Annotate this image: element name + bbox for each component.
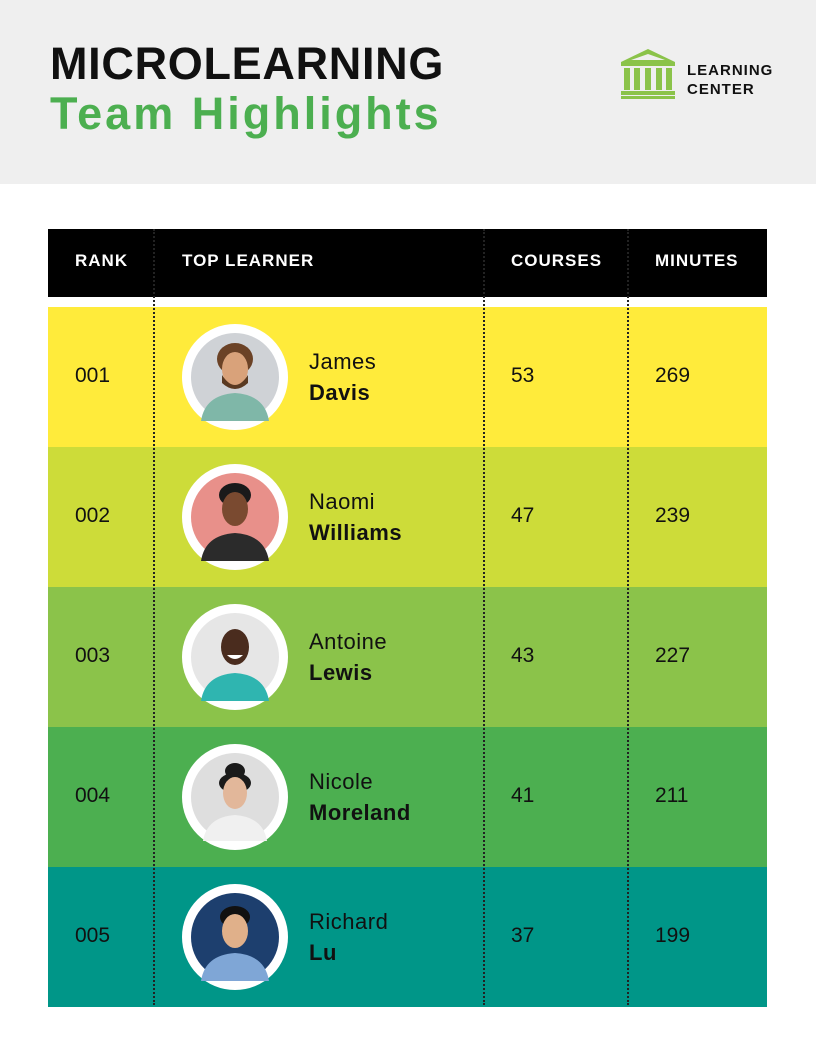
logo text: LEARNING [687,62,773,79]
icon: building [621,49,675,99]
table header: RANK [75,251,128,270]
logo: learning center [621,49,773,99]
row 1: James [309,349,376,374]
row 2: Naomi [309,489,375,514]
avatar: Richard [182,884,288,990]
row 4: 004 [75,784,110,807]
table header [48,229,767,297]
avatar: Naomi [182,464,288,570]
avatar: Nicole [182,744,288,850]
row 5: Richard [309,909,388,934]
title: MICROLEARNING [50,38,444,89]
row 2: 239 [655,504,690,527]
header band [0,0,816,184]
table header: MINUTES [655,251,738,270]
row 5: 37 [511,924,534,947]
row 1: 269 [655,364,690,387]
row 2: 47 [511,504,534,527]
row 4: Moreland [309,800,411,825]
row 4 [48,727,767,867]
row 1: 53 [511,364,534,387]
avatar: Antoine [182,604,288,710]
subtitle: Team Highlights [50,88,442,139]
row 5 [48,867,767,1007]
row 3 [48,587,767,727]
table header: TOP LEARNER [182,251,314,270]
row 5: Lu [309,940,337,965]
row 2 [48,447,767,587]
row 3: 43 [511,644,534,667]
row 3: 227 [655,644,690,667]
row 3: Lewis [309,660,373,685]
row 5: 005 [75,924,110,947]
row 3: Antoine [309,629,387,654]
row 1 [48,307,767,447]
row 5: 199 [655,924,690,947]
avatar: James [182,324,288,430]
row 4: 41 [511,784,534,807]
row 2: Williams [309,520,402,545]
row 3: 003 [75,644,110,667]
logo text [687,62,773,98]
row 1: 001 [75,364,110,387]
row 2: 002 [75,504,110,527]
row 4: Nicole [309,769,373,794]
logo text: CENTER [687,81,755,98]
table header: COURSES [511,251,602,270]
row 1: Davis [309,380,370,405]
row 4: 211 [655,784,688,807]
